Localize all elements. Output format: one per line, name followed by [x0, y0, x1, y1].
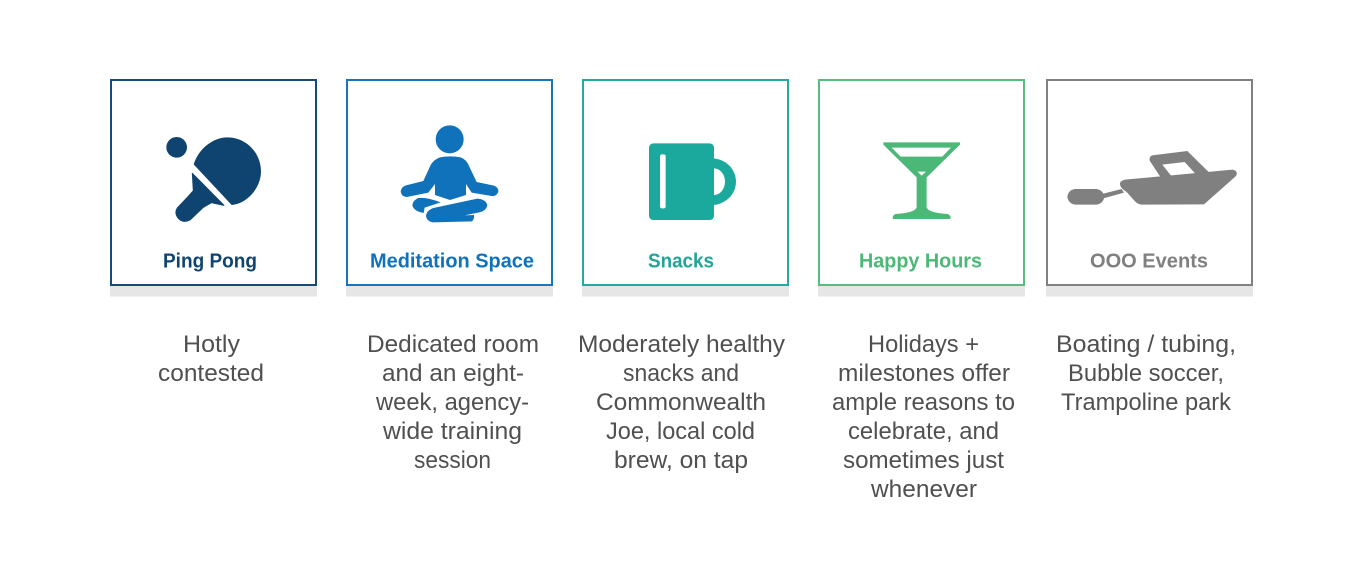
panel: snacks	[578, 80, 789, 474]
description: snacks: Commonwealth	[596, 389, 766, 416]
description: happy hours: Holidays +	[868, 331, 979, 358]
description: meditation space: week, agency-	[375, 389, 529, 416]
panel: ooo events	[1046, 80, 1253, 416]
description: happy hours: sometimes just	[843, 447, 1004, 474]
description: meditation space: and an eight-	[382, 360, 524, 387]
description: meditation space: Dedicated room	[367, 331, 539, 358]
icon: meditating figure	[401, 125, 498, 222]
card: meditation space	[346, 80, 553, 296]
icon: ping pong paddle and ball	[166, 137, 261, 221]
panel: happy hours	[818, 80, 1025, 503]
card: ping pong	[110, 80, 317, 296]
description: meditation space	[367, 331, 539, 474]
description: snacks: Moderately healthy	[578, 331, 785, 358]
description: happy hours	[832, 331, 1015, 503]
panel: ping pong	[110, 80, 317, 387]
heading: happy hours: Happy Hours	[859, 250, 982, 272]
panel: meditation space	[346, 80, 553, 474]
description: ooo events: Bubble soccer,	[1068, 360, 1224, 387]
description: ping pong: Hotly	[183, 331, 240, 358]
description: snacks: snacks and	[623, 360, 739, 387]
description: happy hours: ample reasons to	[832, 389, 1015, 416]
description: happy hours: milestones offer	[838, 360, 1010, 387]
heading: ping pong: Ping Pong	[163, 250, 257, 272]
icon: mug	[649, 143, 736, 220]
description: snacks: Joe, local cold	[606, 418, 755, 445]
heading: ooo events: OOO Events	[1090, 250, 1208, 272]
description: ping pong	[158, 331, 264, 387]
description: ooo events: Boating / tubing,	[1056, 331, 1236, 358]
heading: snacks: Snacks	[648, 250, 714, 272]
description: ooo events: Trampoline park	[1061, 389, 1232, 416]
description: meditation space: session	[414, 447, 491, 474]
heading: meditation space: Meditation Space	[370, 250, 534, 272]
icon: martini glass	[883, 142, 960, 219]
description: happy hours: whenever	[870, 476, 977, 503]
card: snacks	[582, 80, 789, 296]
description: snacks	[578, 331, 785, 474]
description: meditation space: wide training	[382, 418, 522, 445]
description: snacks: brew, on tap	[614, 447, 748, 474]
description: happy hours: celebrate, and	[848, 418, 999, 445]
icon: boat towing tube	[1067, 151, 1237, 205]
description: ping pong: contested	[158, 360, 264, 387]
card: happy hours	[818, 80, 1025, 296]
description: ooo events	[1056, 331, 1236, 416]
card: ooo events	[1046, 80, 1253, 296]
